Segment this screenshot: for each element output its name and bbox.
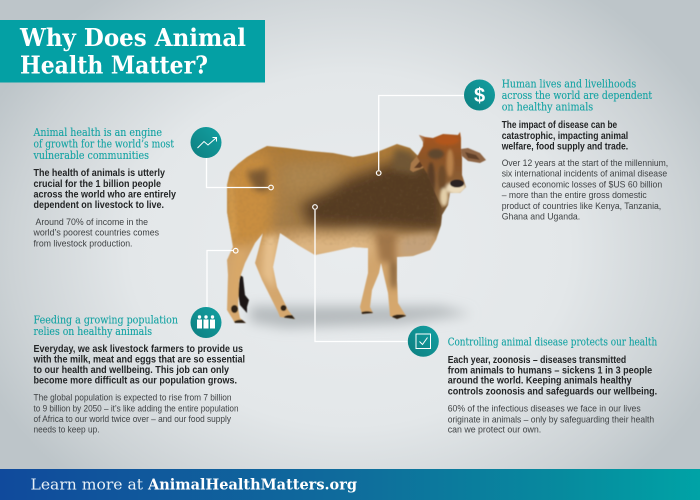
- bold text: The impact of disease can be: [502, 120, 618, 131]
- icon: growth chart: [190, 127, 222, 158]
- bold text: around the world. Keeping animals healthy: [448, 376, 632, 387]
- panel: controlling animal disease: [448, 335, 657, 435]
- footer call to action: Learn more at: [30, 476, 143, 494]
- heading: [33, 126, 175, 162]
- bold text: catastrophic, impacting animal: [502, 131, 628, 142]
- nose: [450, 180, 464, 188]
- bold text: to our health and wellbeing. This job can only: [34, 365, 230, 376]
- body text: of Africa to our world twice over – and our food supply: [34, 414, 231, 424]
- footer call to action: [30, 476, 357, 494]
- bold text: across the world who are entirely: [34, 189, 177, 200]
- heading: vulnerable communities: [33, 149, 149, 162]
- title banner: [0, 20, 265, 82]
- body text: 60% of the infectious diseases we face in our lives: [448, 404, 641, 414]
- panel: engine of growth: [33, 126, 177, 248]
- bold text: The health of animals is utterly: [34, 168, 165, 179]
- bold text: [33, 344, 245, 387]
- panel: human lives and livelihoods: [501, 77, 668, 222]
- heading: of growth for the world’s most: [34, 138, 175, 150]
- body text: can we protect our own.: [448, 425, 541, 435]
- title: Why Does Animal: [19, 23, 246, 52]
- cow illustration: [220, 130, 486, 330]
- left ear: [410, 153, 428, 172]
- bold text: Each year, zoonosis – diseases transmitted: [448, 355, 626, 366]
- bold text: [34, 168, 177, 211]
- body text: Around 70% of income in the: [36, 217, 148, 227]
- right ear: [461, 148, 486, 163]
- body text: [34, 393, 238, 435]
- body text: [502, 158, 668, 222]
- heading: Controlling animal disease protects our health: [448, 335, 657, 348]
- heading: across the world are dependent: [502, 89, 653, 102]
- body text: Ghana and Uganda.: [502, 212, 580, 222]
- bold text: Everyday, we ask livestock farmers to provide us: [34, 344, 244, 355]
- body text: [448, 404, 654, 435]
- head: [417, 132, 466, 208]
- heading: Feeding a growing population: [34, 313, 178, 326]
- body text: from livestock production.: [34, 238, 132, 248]
- heading: Human lives and livelihoods: [502, 77, 636, 90]
- body text: six international incidents of animal disease: [502, 169, 667, 179]
- body text: to 9 billion by 2050 – it’s like adding the entire population: [34, 403, 238, 413]
- heading: relies on healthy animals: [34, 325, 152, 338]
- body text: [33, 217, 159, 248]
- bold text: welfare, food supply and trade.: [501, 142, 628, 153]
- heading: on healthy animals: [502, 101, 593, 114]
- bold text: dependent on livestock to live.: [34, 200, 164, 211]
- bold text: [501, 120, 628, 153]
- bold text: with the milk, meat and eggs that are so essential: [33, 355, 245, 366]
- body text: needs to keep up.: [34, 425, 100, 435]
- panel: feeding a growing population: [33, 313, 245, 435]
- icon: dollar: $: [474, 85, 485, 107]
- title: [19, 23, 246, 80]
- tail: [238, 275, 249, 313]
- heading: [502, 77, 653, 114]
- bold text: become more difficult as our population grows.: [34, 376, 237, 387]
- body text: – more than the entire gross domestic: [502, 190, 647, 200]
- body text: The global population is expected to rise from 7 billion: [34, 393, 232, 403]
- body text: world’s poorest countries comes: [33, 228, 159, 238]
- footer banner: [0, 469, 700, 500]
- heading: Animal health is an engine: [33, 126, 162, 139]
- icon: people: [190, 307, 222, 338]
- connector lines: [206, 96, 464, 342]
- bold text: controls zoonosis and safeguards our wellbeing.: [448, 386, 657, 397]
- ground shadow under cow: [250, 306, 472, 328]
- icon: checkbox: [408, 326, 439, 357]
- footer call to action: AnimalHealthMatters.org: [147, 476, 357, 494]
- bold text: [448, 355, 657, 397]
- cow body: [226, 143, 448, 324]
- hooves and hocks: [231, 305, 408, 324]
- heading: [34, 313, 178, 338]
- title: Health Matter?: [20, 50, 208, 80]
- body text: originate in animals – only by safeguarding their health: [448, 414, 654, 424]
- body text: product of countries like Kenya, Tanzania,: [502, 201, 661, 211]
- body text: caused economic losses of $US 60 billion: [502, 179, 662, 189]
- bold text: from animals to humans – sickens 1 in 3 people: [448, 365, 653, 376]
- body text: Over 12 years at the start of the millennium,: [502, 158, 668, 168]
- bold text: crucial for the 1 billion people: [34, 179, 162, 190]
- icon: dollar: [464, 80, 495, 110]
